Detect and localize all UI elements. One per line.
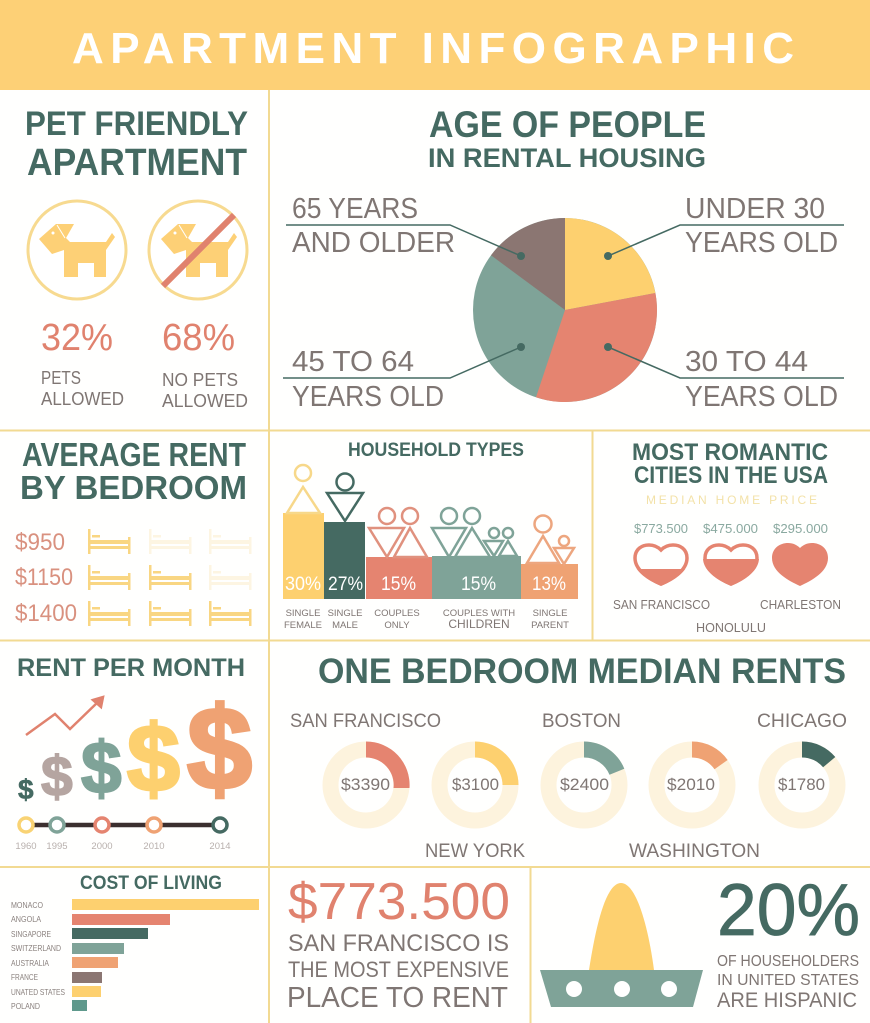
label: 65 years and older: AND OLDER bbox=[292, 227, 455, 259]
icon: growing dollar signs: $ bbox=[81, 728, 122, 809]
heading: most romantic cities: MOST ROMANTIC bbox=[632, 439, 828, 466]
donut: washington: $2010 bbox=[667, 775, 715, 794]
heading: pet friendly: PET FRIENDLY bbox=[25, 105, 248, 143]
stat: 68 percent no pets allowed: ALLOWED bbox=[162, 391, 248, 411]
bar chart: household types: 13% bbox=[532, 574, 566, 595]
bar chart: cost of living: AUSTRALIA bbox=[11, 958, 49, 968]
timeline: 1995 bbox=[46, 841, 68, 852]
donut: new york bbox=[440, 742, 518, 820]
stat: 68 percent no pets allowed: NO PETS bbox=[162, 370, 238, 390]
label: 30 to 44 years old: 30 TO 44 bbox=[685, 346, 808, 378]
timeline: 1960 bbox=[15, 841, 37, 852]
text: of householders bbox=[717, 953, 859, 1012]
icon: heart charleston bbox=[772, 543, 828, 586]
rent prices bbox=[15, 529, 77, 627]
bar chart: household types bbox=[283, 513, 578, 599]
prices bbox=[634, 521, 828, 536]
timeline bbox=[15, 818, 231, 852]
text: san francisco most expensive: SAN FRANCISCO IS bbox=[288, 930, 509, 957]
panel: age of people bbox=[283, 104, 844, 413]
icon: dog not allowed bbox=[149, 201, 247, 299]
label: 45 to 64 years old: YEARS OLD bbox=[292, 381, 444, 413]
panel: rent per month bbox=[15, 654, 252, 852]
text: san francisco most expensive bbox=[287, 930, 509, 1014]
category labels: SINGLE bbox=[286, 608, 320, 619]
label: 45 to 64 years old bbox=[292, 346, 444, 413]
bar chart: household types: 15% bbox=[461, 574, 496, 595]
stat: 32 percent pets allowed: PETS bbox=[41, 368, 81, 388]
label: 30 to 44 years old bbox=[685, 346, 838, 413]
heading: average rent by bedroom: AVERAGE RENT bbox=[22, 436, 246, 473]
city names: SAN FRANCISCO bbox=[613, 597, 710, 612]
icon: growing dollar signs: $ bbox=[41, 745, 73, 809]
rent prices: $950 bbox=[15, 529, 65, 556]
city names: HONOLULU bbox=[696, 620, 766, 635]
heading: most romantic cities: CITIES IN THE USA bbox=[634, 462, 828, 489]
icon: couple bbox=[369, 508, 427, 557]
text: of householders: ARE HISPANIC bbox=[717, 989, 857, 1012]
pie chart bbox=[473, 218, 657, 402]
label: 45 to 64 years old: 45 TO 64 bbox=[292, 346, 414, 378]
panel: average rent by bedroom bbox=[15, 436, 252, 627]
heading: average rent by bedroom bbox=[20, 436, 247, 506]
stat: 32 percent pets allowed: 32% bbox=[41, 317, 113, 359]
heading: age of people bbox=[428, 104, 706, 173]
heading: pet friendly bbox=[25, 105, 248, 184]
heading: age of people: AGE OF PEOPLE bbox=[429, 104, 706, 145]
category labels: ONLY bbox=[384, 620, 410, 631]
category labels: PARENT bbox=[531, 620, 569, 631]
stat: 20 percent: 20% bbox=[717, 870, 860, 951]
category labels: SINGLE bbox=[533, 608, 567, 619]
panel: cost of living bbox=[11, 873, 259, 1011]
city labels: NEW YORK bbox=[425, 841, 525, 862]
stat: 32 percent pets allowed bbox=[41, 317, 124, 409]
city labels: CHICAGO bbox=[757, 711, 847, 732]
heading: cost of living: COST OF LIVING bbox=[80, 873, 222, 894]
text: of householders: IN UNITED STATES bbox=[717, 972, 859, 989]
city labels: SAN FRANCISCO bbox=[290, 711, 441, 732]
heading: rent per month: RENT PER MONTH bbox=[17, 654, 245, 682]
icon: growing dollar signs: $ bbox=[18, 774, 34, 805]
icon: growing dollar signs bbox=[18, 683, 252, 814]
label: 30 to 44 years old: YEARS OLD bbox=[685, 381, 838, 413]
city labels: BOSTON bbox=[542, 711, 621, 732]
label: 65 years and older bbox=[292, 193, 455, 259]
text: san francisco most expensive: PLACE TO RENT bbox=[287, 982, 508, 1014]
donut: boston bbox=[548, 742, 624, 820]
label: under 30 years old: UNDER 30 bbox=[685, 193, 825, 225]
icon: heart san francisco bbox=[633, 543, 689, 586]
timeline: 2000 bbox=[91, 841, 113, 852]
category labels bbox=[284, 608, 569, 631]
stat: 68 percent no pets allowed: 68% bbox=[162, 317, 235, 359]
heading: most romantic cities bbox=[632, 439, 828, 489]
donut: chicago bbox=[766, 742, 838, 820]
heading: pet friendly: APARTMENT bbox=[27, 142, 247, 184]
icon: single female bbox=[287, 465, 320, 513]
bar chart: household types: 30% bbox=[285, 574, 321, 595]
subheading: median home price: MEDIAN HOME PRICE bbox=[646, 493, 817, 507]
bar chart: cost of living: SWITZERLAND bbox=[11, 943, 61, 953]
icon: couple with children bbox=[432, 508, 517, 557]
bar chart: household types: 15% bbox=[381, 574, 416, 595]
heading: one bedroom median rents: ONE BEDROOM MEDIAN RENTS bbox=[318, 652, 846, 691]
bar chart: cost of living: ANGOLA bbox=[11, 914, 41, 924]
donut: boston: $2400 bbox=[560, 775, 609, 794]
category labels: COUPLES bbox=[374, 608, 420, 619]
bar chart: cost of living: MONACO bbox=[11, 900, 43, 910]
city names bbox=[613, 597, 841, 635]
panel: pet friendly apartment bbox=[25, 105, 248, 411]
stat: 773.500: $773.500 bbox=[288, 873, 510, 931]
prices: $773.500 bbox=[634, 521, 688, 536]
panel: one bedroom median rents bbox=[290, 652, 847, 862]
icon: sombrero bbox=[540, 883, 703, 1007]
donut: new york: $3100 bbox=[452, 775, 499, 794]
label: under 30 years old bbox=[685, 193, 838, 259]
bar chart: cost of living: SINGAPORE bbox=[11, 929, 51, 939]
category labels: MALE bbox=[332, 620, 358, 631]
stat: 68 percent no pets allowed bbox=[162, 317, 248, 411]
panel: hispanic householders bbox=[540, 870, 860, 1012]
icon: growing dollar signs: $ bbox=[127, 706, 180, 812]
text: san francisco most expensive: THE MOST EXPENSIVE bbox=[288, 957, 509, 982]
stat: 32 percent pets allowed: ALLOWED bbox=[41, 389, 124, 409]
bar chart: cost of living bbox=[11, 899, 259, 1011]
category labels: COUPLES WITH bbox=[443, 608, 515, 619]
icon: single parent bbox=[527, 516, 574, 564]
icon: heart honolulu bbox=[703, 543, 759, 586]
bar chart: cost of living: UNATED STATES bbox=[11, 987, 65, 997]
rent prices: $1400 bbox=[15, 600, 77, 627]
label: 65 years and older: 65 YEARS bbox=[292, 193, 418, 225]
donut: san francisco: $3390 bbox=[341, 775, 390, 794]
icon: rising arrow bbox=[26, 697, 103, 735]
bar chart: cost of living: POLAND bbox=[11, 1001, 40, 1011]
donut: washington bbox=[656, 742, 728, 820]
bed icons bbox=[88, 529, 252, 626]
donut: san francisco bbox=[330, 741, 410, 820]
heading: age of people: IN RENTAL HOUSING bbox=[428, 143, 706, 173]
prices: $475.000 bbox=[703, 521, 758, 536]
label: under 30 years old: YEARS OLD bbox=[685, 227, 838, 259]
header banner bbox=[0, 0, 870, 90]
panel: most romantic cities bbox=[613, 439, 841, 635]
category labels: FEMALE bbox=[284, 620, 322, 631]
bar chart: household types: 27% bbox=[328, 574, 363, 595]
panel: most expensive place bbox=[287, 873, 510, 1014]
heading: household types: HOUSEHOLD TYPES bbox=[348, 440, 524, 461]
timeline: 2010 bbox=[143, 841, 165, 852]
header banner: APARTMENT INFOGRAPHIC bbox=[72, 24, 794, 73]
city labels bbox=[290, 711, 847, 862]
timeline: 2014 bbox=[209, 841, 231, 852]
category labels: SINGLE bbox=[328, 608, 362, 619]
rent prices: $1150 bbox=[15, 564, 73, 591]
icon: growing dollar signs: $ bbox=[187, 683, 252, 814]
prices: $295.000 bbox=[773, 521, 828, 536]
donut: chicago: $1780 bbox=[778, 775, 825, 794]
city names: CHARLESTON bbox=[760, 597, 841, 612]
heading: average rent by bedroom: BY BEDROOM bbox=[20, 469, 247, 506]
category labels: CHILDREN bbox=[448, 617, 510, 631]
panel: household types bbox=[283, 440, 578, 631]
icon: single male bbox=[327, 474, 363, 521]
city labels: WASHINGTON bbox=[629, 841, 760, 862]
icon: dog allowed bbox=[28, 201, 126, 299]
bar chart: cost of living: FRANCE bbox=[11, 972, 38, 982]
